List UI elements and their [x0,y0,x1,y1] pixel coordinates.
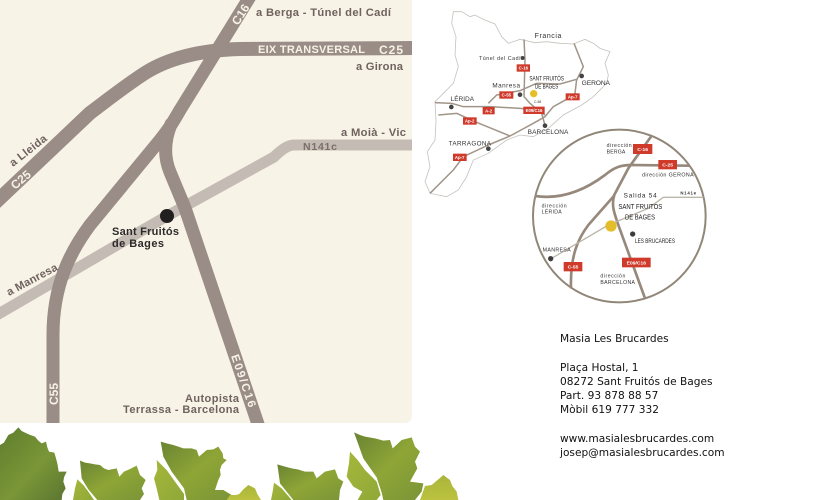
label: Lérida: LÉRIDA [451,94,475,103]
label: dirección Lérida: LÉRIDA [542,209,562,216]
label: Sant Fruitós de Bages: SANT FRUITOS [618,202,662,211]
label: Sant Fruitós de Bages: DE BAGES [535,83,559,90]
marker: Sant Fruitós [530,90,537,97]
road network [430,39,583,193]
contact details: www.masialesbrucardes.com [560,433,714,445]
leaf 4 left lobe [271,483,292,500]
road: C16 and C55 [53,0,251,430]
badge labels: C-55 [502,93,512,98]
label: dirección Gerona: dirección GERONA [642,172,694,178]
label: Salida 54: Salida 54 [624,193,657,200]
label: dirección Barcelona [600,274,636,286]
badge labels: Ap-2 [465,119,475,124]
contact details: Mòbil 619 777 332 [560,404,659,416]
leaf 3 main [161,442,232,500]
road label: C55: C55 [47,383,61,405]
panel: local road map [0,0,420,430]
label: Sant Fruitós de Bages: de Bages [112,238,164,250]
road: N141c [0,145,420,316]
leaf 2 main [80,461,146,500]
leaf 3 left lobe [154,460,184,500]
badge: E09/C16 [622,258,651,267]
badge labels: Ap-7 [568,95,578,100]
road label: N141c: N141c [303,141,337,153]
road label: C16: C16 [229,1,253,28]
label: a Lleida: a Lleida [7,132,50,169]
small yellow leaf [227,485,261,500]
label: dirección Barcelona: BARCELONA [600,280,636,286]
label: a Manresa: a Manresa [5,261,61,299]
label: a Moià - Vic: a Moià - Vic [341,127,406,139]
label: a Girona: a Girona [356,61,404,73]
leaf 1 [0,427,67,500]
badge labels: Ap-7 [455,155,465,160]
badge labels: E09/C16 [526,108,543,113]
road label: C25 west: C25 [8,167,34,192]
contact details [560,333,725,459]
road label: C25 east: C25 [379,43,403,57]
contact details: josep@masialesbrucardes.com [560,447,725,459]
badge: C-55: C-55 [568,265,579,271]
map background [0,0,412,423]
label: N141e: N141e [680,191,697,196]
label: C-58: C-58 [534,100,541,104]
badge labels: C-16 [519,66,529,71]
label: Gerona: GERONA [582,80,611,87]
label: Sant Fruitós de Bages [529,73,564,90]
label: Autopista Terrassa - Barcelona: Terrassa - Barcelona [123,404,240,416]
label: Tarragona: TARRAGONA [449,141,492,148]
badge: C-16 [633,144,652,154]
leaf 5 main [354,432,423,500]
marker: Sant Fruitós [160,209,174,223]
label: dirección Barcelona: dirección [600,274,625,280]
badge labels: A-2 [485,108,493,113]
detail roads [535,136,690,298]
marker: Manresa [548,256,553,261]
contact details: Plaça Hostal, 1 [560,362,639,374]
leaf 5 left lobe [347,452,381,500]
label: Autopista Terrassa - Barcelona: Autopista [185,393,240,405]
region outline [425,12,610,197]
label: Barcelona: BARCELONA [528,129,569,136]
road: E09/C16 [166,122,260,430]
label: Manresa: Manresa [492,83,520,90]
marker: Les Brucardes [630,231,635,237]
city markers [449,56,584,151]
decorative vine leaves, left group [0,427,240,500]
label: Sant Fruitós de Bages [112,226,179,250]
road label: Eix Transversal: EIX TRANSVERSAL [258,44,365,56]
leaf 2 left lobe [73,479,94,500]
label: dirección Berga [607,143,632,155]
label: Sant Fruitós de Bages: DE BAGES [625,212,655,221]
marker: Sant Fruitós [605,220,617,232]
label: a Berga - Túnel del Cadí: a Berga - Túnel del Cadí [256,7,392,19]
label: dirección Berga: dirección [607,143,632,149]
leaf 6 [420,475,458,500]
road: C25 Eix Transversal [0,48,420,203]
badge: C-16: C-16 [637,147,648,153]
badge labels [455,66,578,160]
small yellow leaf left edge [232,494,240,500]
contact details: 08272 Sant Fruitós de Bages [560,376,713,388]
label: Les Brucardes: LES BRUCARDES [635,239,675,245]
road: C-16 [571,136,652,288]
road network [0,0,420,430]
label: Sant Fruitós de Bages: SANT FRUITÓS [529,73,564,82]
road badges [453,64,580,161]
label: Túnel del Cadí: Túnel del Cadí [479,56,521,62]
badge: C-55 [564,262,582,271]
label: Sant Fruitós de Bages: Sant Fruitós [112,226,179,238]
label: dirección Lérida [542,204,567,216]
decorative vine leaves, right group [227,432,458,500]
badge: C-25 [658,160,677,169]
panel: Catalonia regional map [425,12,611,197]
road: C-25 [535,165,690,197]
label: Francia: Francia [535,33,561,40]
label: Manresa: MANRESA [543,248,571,254]
road: N141e and Manresa link [552,197,703,258]
label: Autopista Terrassa - Barcelona [123,393,240,416]
label: dirección Berga: BERGA [607,149,626,155]
contact details: Masia Les Brucardes [560,333,669,345]
road label: E09/C16: E09/C16 [228,353,257,409]
badge: C-25: C-25 [662,163,673,169]
circle frame [533,130,706,302]
contact details: Part. 93 878 88 57 [560,390,658,402]
panel: circular detail map [533,130,706,302]
label: Sant Fruitós de Bages [618,202,662,221]
road: E09/C16 [613,195,645,298]
label: dirección Lérida: dirección [542,204,567,210]
leaf 4 main [277,464,343,500]
badge: E09/C16: E09/C16 [627,260,646,266]
